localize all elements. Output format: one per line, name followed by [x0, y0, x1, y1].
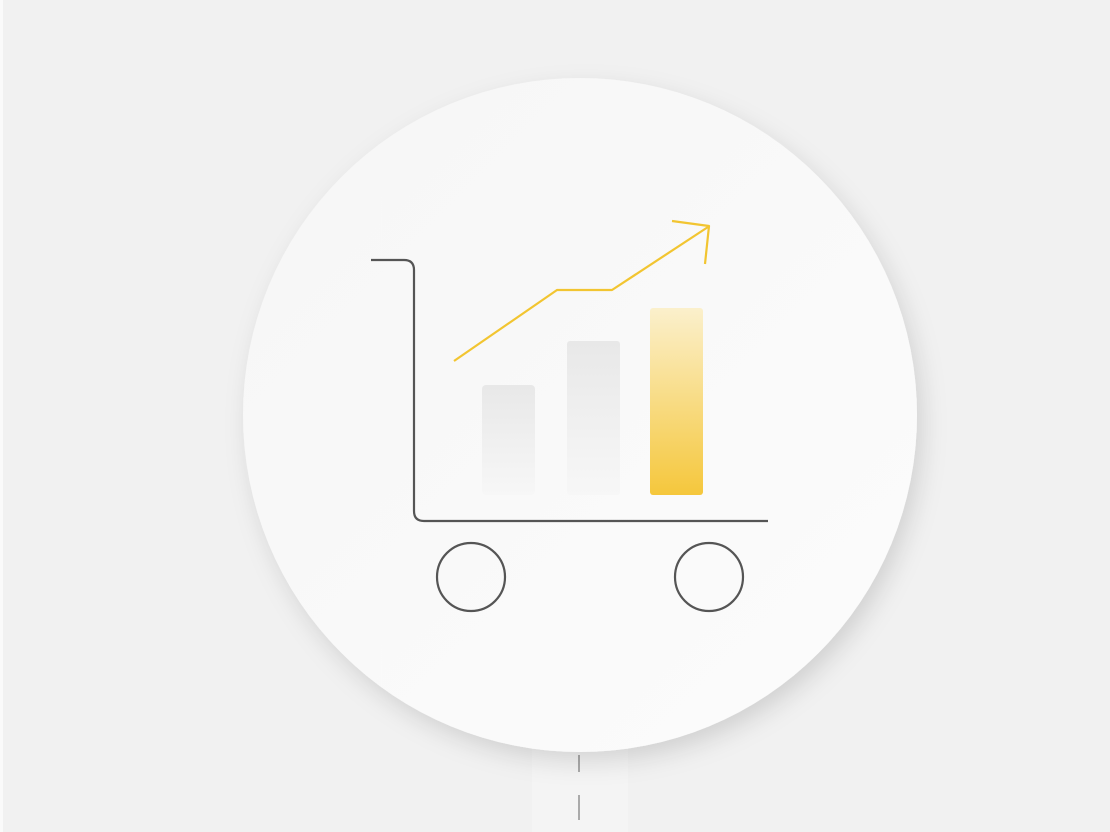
arrow: growth trend [454, 221, 709, 361]
bar chart [482, 308, 703, 495]
icon: cart [371, 260, 768, 611]
circle panel [243, 78, 917, 752]
connector strip with dashed line [532, 740, 628, 832]
